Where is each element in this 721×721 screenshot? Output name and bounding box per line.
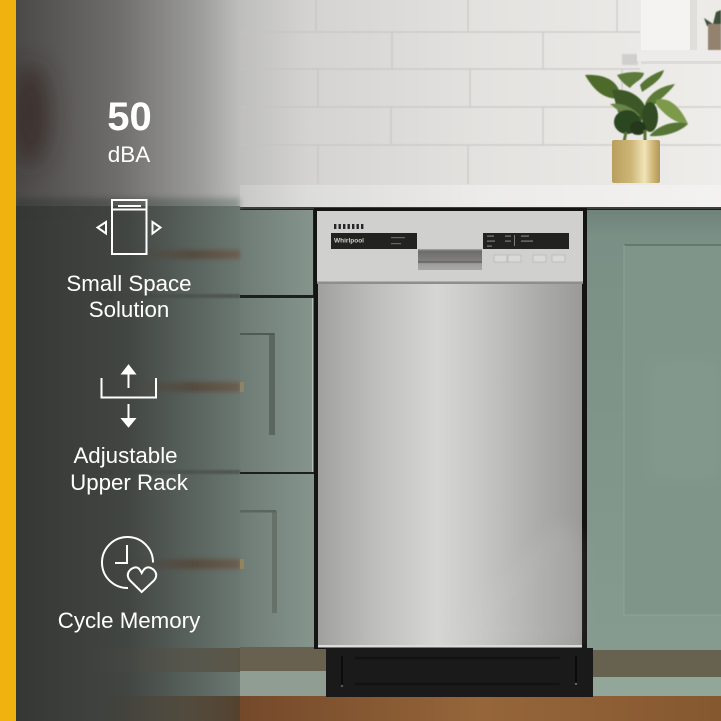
option strip [483, 233, 569, 249]
handle [418, 249, 482, 270]
handle ends [240, 382, 244, 392]
shelf [622, 0, 721, 65]
floor [240, 696, 721, 721]
blurred reflection [10, 63, 50, 167]
blurred handles [130, 250, 240, 259]
countertop [240, 185, 721, 207]
feature: small space solution [66, 200, 192, 322]
toe kick and base [240, 647, 721, 697]
small shelf plant [704, 10, 721, 50]
toe grille [326, 648, 593, 697]
yellow side bar [0, 0, 16, 721]
feature: small space solution: Solution [89, 297, 169, 322]
feature: cycle memory [58, 537, 201, 633]
left cabinet drawers [240, 210, 316, 648]
right cabinet [587, 210, 721, 650]
blurred base bands [90, 648, 240, 672]
dishwasher [314, 208, 593, 697]
feature: 50 dBA [107, 95, 152, 167]
label: Small Space [66, 271, 192, 296]
buttons [494, 255, 565, 262]
icon: dishwasher with side arrows [98, 200, 160, 254]
label: Adjustable [73, 443, 178, 468]
label: Cycle Memory [58, 608, 201, 633]
indicator dots [334, 224, 363, 229]
brand strip [331, 233, 417, 249]
door [318, 284, 582, 648]
control panel [317, 211, 583, 284]
unit: dBA [108, 142, 150, 167]
soft counter edge [16, 198, 240, 212]
brand strip: Whirlpool [334, 238, 364, 244]
feature: adjustable upper rack: Upper Rack [70, 470, 189, 495]
value: 50 [107, 95, 152, 139]
dark cabinet backing [240, 209, 721, 649]
icon: clock with heart [102, 537, 156, 592]
frosted left overlay [10, 0, 244, 721]
feature: adjustable upper rack [70, 365, 189, 495]
icon: rack with up and down arrows [102, 365, 156, 427]
blurred drawer lines [90, 294, 240, 298]
potted plant [585, 70, 688, 183]
kitchen background [240, 0, 721, 721]
tile wall [240, 0, 721, 186]
